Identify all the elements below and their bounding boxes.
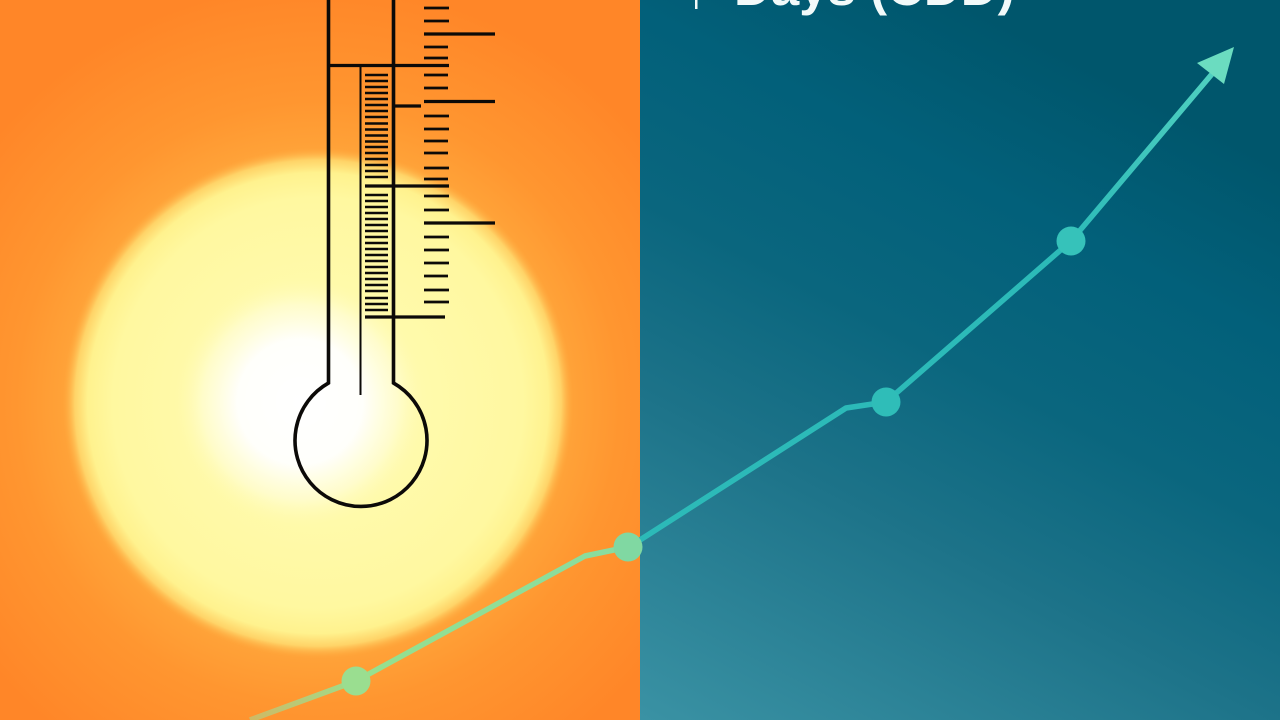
data point 2	[614, 532, 642, 562]
trend line on teal	[640, 74, 1212, 540]
capillary hatch marks	[365, 75, 388, 310]
capillary cross bars	[330, 66, 449, 317]
data point 4	[1056, 226, 1086, 256]
long scale ticks	[424, 34, 495, 223]
sun white core	[188, 290, 412, 514]
panel: teal chart background	[640, 0, 1280, 720]
thermometer outline and bulb	[295, 0, 427, 506]
sun disc	[62, 147, 574, 659]
data point 1	[342, 666, 370, 696]
inner capillary	[360, 66, 362, 395]
data point 3	[872, 388, 900, 416]
line chart: rising trend	[342, 47, 1234, 696]
trend line on orange	[250, 540, 640, 720]
scale ticks	[424, 8, 449, 302]
icon: thermometer	[295, 0, 495, 506]
arrow head	[1197, 47, 1234, 84]
panel: hot sun background	[0, 0, 640, 720]
